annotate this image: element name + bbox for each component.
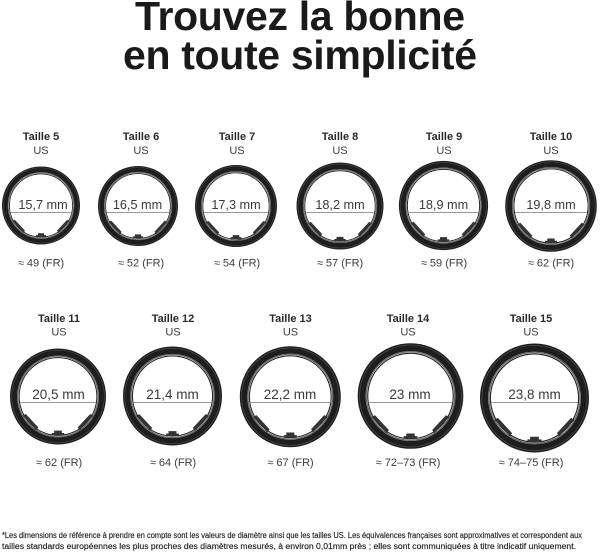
ring: taille 11: US: [51, 326, 67, 338]
ring: taille 12: Taille 12: [152, 313, 194, 325]
ring: taille 13: Taille 13: [269, 313, 312, 325]
ring: taille 7: 17,3 mm: [211, 198, 261, 212]
ring: taille 5: [3, 131, 79, 270]
footnote: [2, 531, 582, 551]
ring: taille 6: ≈ 52 (FR): [118, 258, 164, 270]
ring: taille 14: 23 mm: [389, 387, 431, 402]
ring: taille 5: US: [33, 145, 49, 157]
ring: taille 12: 21,4 mm: [146, 387, 199, 402]
ring: taille 13: 22,2 mm: [264, 387, 316, 402]
ring: taille 11: ≈ 62 (FR): [36, 457, 82, 469]
ring: taille 6: [99, 131, 177, 270]
ring: taille 8: ≈ 57 (FR): [317, 258, 363, 270]
ring: taille 11: Taille 11: [38, 313, 80, 325]
ring: taille 7: ≈ 54 (FR): [214, 258, 260, 270]
ring: taille 9: [400, 131, 487, 270]
ring: taille 12: ≈ 64 (FR): [150, 457, 196, 469]
ring: taille 5: Taille 5: [23, 131, 59, 143]
ring: taille 15: US: [523, 326, 539, 338]
ring: taille 6: 16,5 mm: [113, 198, 162, 212]
ring: taille 11: 20,5 mm: [32, 387, 85, 402]
ring: taille 15: ≈ 74–75 (FR): [499, 457, 563, 469]
ring: taille 8: 18,2 mm: [315, 198, 365, 212]
ring: taille 7: [196, 131, 276, 270]
ring: taille 13: ≈ 67 (FR): [267, 457, 314, 469]
ring: taille 15: 23,8 mm: [508, 387, 561, 402]
ring: taille 9: Taille 9: [426, 131, 462, 143]
ring: taille 10: 19,8 mm: [526, 198, 576, 212]
ring: taille 7: Taille 7: [219, 131, 255, 143]
ring: taille 9: 18,9 mm: [419, 198, 468, 212]
ring: taille 11: [12, 313, 104, 469]
ring: taille 14: [360, 313, 461, 469]
ring: taille 15: Taille 15: [510, 313, 552, 325]
ring: taille 10: [507, 131, 595, 270]
ring: taille 8: Taille 8: [322, 131, 358, 143]
ring: taille 5: ≈ 49 (FR): [18, 258, 64, 270]
ring: taille 13: [242, 313, 339, 469]
ring: taille 8: [298, 131, 382, 270]
ring: taille 12: [125, 313, 220, 469]
ring: taille 15: [482, 313, 587, 469]
ring: taille 10: US: [543, 145, 559, 157]
ring: taille 14: ≈ 72–73 (FR): [376, 457, 440, 469]
ring: taille 6: US: [133, 145, 149, 157]
ring: taille 9: ≈ 59 (FR): [421, 258, 467, 270]
ring: taille 14: US: [400, 326, 416, 338]
ring: taille 7: US: [229, 145, 245, 157]
ring: taille 10: ≈ 62 (FR): [528, 258, 574, 270]
ring: taille 14: Taille 14: [387, 313, 430, 325]
ring: taille 12: US: [165, 326, 181, 338]
ring: taille 5: 15,7 mm: [18, 198, 68, 212]
ring: taille 13: US: [283, 326, 298, 338]
ring: taille 9: US: [436, 145, 452, 157]
footnote: tailles standards européennes les plus proches des diamètres mesurés, à environ 0,01mm près ; elles sont communiquées à titre indicatif uniquement.: [2, 542, 576, 551]
ring: taille 10: Taille 10: [530, 131, 572, 143]
ring: taille 8: US: [332, 145, 348, 157]
ring: taille 6: Taille 6: [123, 131, 159, 143]
title: en toute simplicité: [123, 32, 477, 78]
title: [123, 0, 477, 78]
